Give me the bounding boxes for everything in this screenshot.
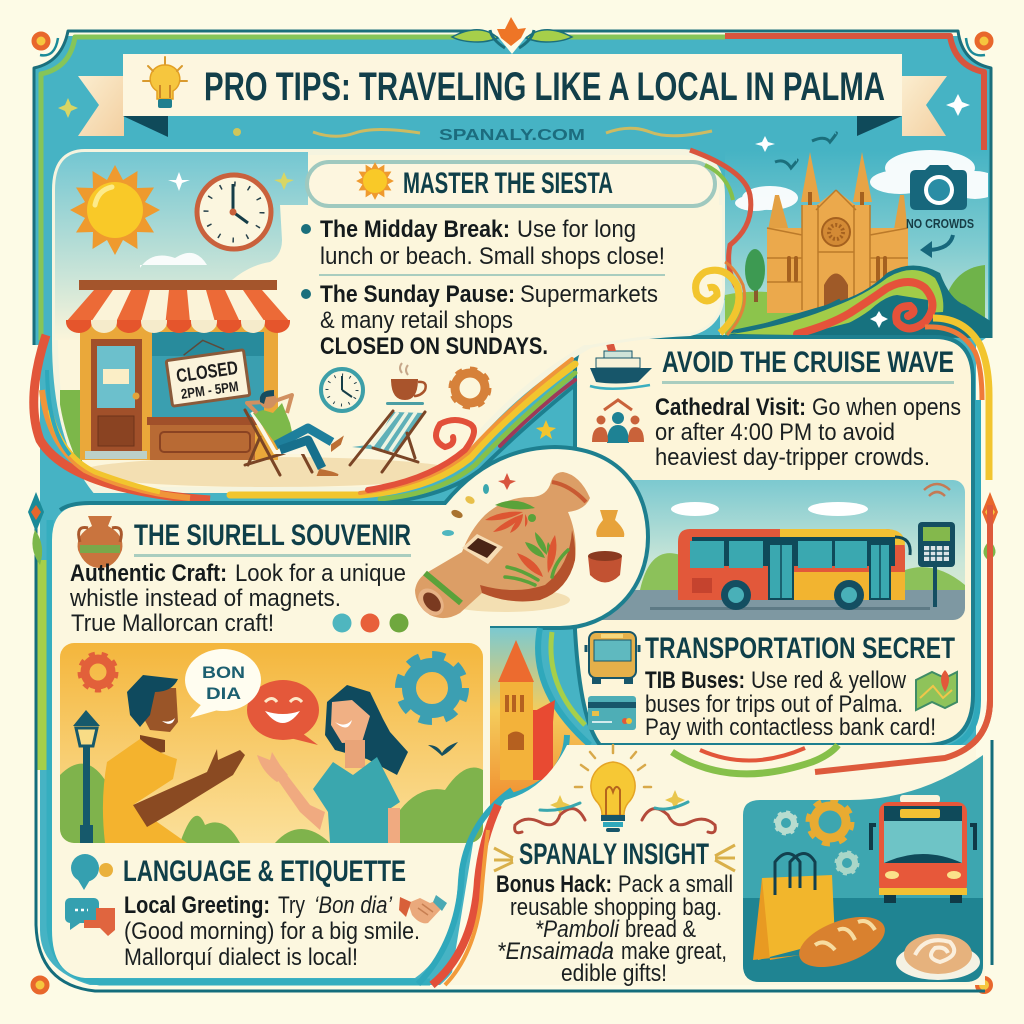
text: bonus hack: edible gifts! — [561, 960, 667, 987]
text: authentic craft — [69, 560, 406, 637]
text: bonus hack: reusable shopping bag. — [510, 894, 722, 921]
panel: avoid the cruise wave and transportation — [575, 318, 990, 772]
text: authentic craft: whistle instead of magnets. — [69, 585, 341, 612]
star decoration — [536, 420, 556, 439]
clouds — [735, 150, 1000, 211]
decorative right swirl — [690, 150, 751, 335]
icon: talking heads — [71, 854, 113, 890]
website label: SPANALY.COM — [439, 127, 585, 144]
illustration: conversation — [60, 643, 483, 843]
illustration: siurell whistle — [413, 472, 590, 621]
text: TIB buses: TIB Buses: — [645, 667, 745, 694]
icon: gear — [451, 369, 489, 407]
icon: wall clock — [197, 175, 271, 249]
shop counter — [147, 417, 265, 460]
bushes — [60, 764, 483, 843]
leaf accents — [494, 845, 735, 871]
icon: coffee cup — [386, 363, 426, 405]
icon: payment terminal — [918, 484, 955, 607]
decorative waves — [722, 266, 992, 338]
arrow: no crowds — [920, 235, 953, 258]
text: authentic craft: Authentic Craft: — [70, 560, 227, 587]
panel: spanaly insight — [419, 701, 993, 988]
man figure — [103, 675, 245, 843]
text: cathedral visit: Cathedral Visit: — [655, 394, 806, 421]
text: bonus hack: *Pamboli — [535, 916, 620, 943]
icon: red and yellow bus — [678, 529, 910, 610]
text: cathedral visit — [655, 394, 961, 471]
text: midday break: Use for long — [517, 216, 636, 243]
heading pill: master the siesta — [307, 162, 715, 206]
bird — [428, 742, 458, 756]
text: sunday pause: Supermarkets — [520, 281, 658, 308]
text: bonus hack: Bonus Hack: — [496, 871, 612, 898]
icon: bank card — [588, 696, 636, 730]
icon: sun — [70, 165, 160, 255]
text: midday break: lunch or beach. Small shops close! — [320, 243, 665, 270]
icon: church tower — [498, 640, 555, 780]
icon: small bus — [586, 632, 639, 684]
illustration: empty deck chair — [350, 411, 425, 472]
text: cathedral visit: heaviest day-tripper crowds. — [655, 444, 930, 471]
top fleck decorations — [58, 94, 970, 190]
icon: red smile bubble — [247, 680, 319, 745]
language and etiquette text — [65, 854, 447, 971]
text: TIB buses: buses for trips out of Palma. — [645, 691, 903, 718]
sign: closed 2pm-5pm: CLOSED — [175, 358, 239, 387]
label: no crowds: NO CROWDS — [906, 216, 974, 231]
panel: siurell souvenir and language — [52, 447, 648, 978]
illustration: closed shop — [66, 280, 290, 460]
illustration: man relaxing on deck chair — [245, 390, 342, 475]
sign: closed 2pm-5pm — [164, 335, 250, 406]
text: bonus hack: make great, — [621, 938, 727, 965]
panel: siesta — [34, 150, 751, 503]
top centre ornament — [452, 17, 572, 54]
icon: handshake — [399, 895, 447, 923]
icon: gears — [775, 800, 858, 874]
illustration: shopping, bus and food — [743, 750, 983, 988]
icon: lightbulb — [550, 745, 685, 832]
icon: map — [916, 670, 957, 710]
illustration: bus scene — [575, 480, 965, 620]
speech bubble: bon dia — [185, 649, 261, 718]
text: cathedral visit: Go when opens — [812, 394, 961, 421]
text: authentic craft: Look for a unique — [235, 560, 406, 587]
icon: bread loaf — [799, 917, 885, 967]
icon: crowd — [592, 400, 644, 443]
text: bonus hack — [496, 871, 733, 987]
birds — [775, 133, 836, 168]
text: local greeting: Local Greeting: — [124, 892, 270, 919]
heading: master the siesta text: MASTER THE SIESTA — [403, 167, 613, 200]
text: sunday pause: The Sunday Pause: — [320, 281, 515, 308]
icon: chat bubbles — [65, 898, 115, 936]
header sub-line — [233, 127, 712, 144]
icon: clay jug — [78, 516, 122, 568]
icon: teal gear — [399, 655, 465, 721]
icon: bus front — [871, 795, 975, 903]
text: sunday pause: & many retail shops — [320, 307, 513, 334]
text: local greeting — [124, 892, 420, 971]
text: TIB buses: Pay with contactless bank card! — [645, 714, 936, 741]
icon: small pot — [588, 551, 622, 582]
left rainbow stripes — [34, 335, 210, 500]
speech bubble: bon dia: DIA — [206, 684, 241, 703]
icon: title lightbulb — [143, 57, 187, 108]
lamp post — [73, 710, 100, 843]
icon: tree — [745, 249, 765, 302]
decorative flourishes — [515, 802, 715, 833]
icon: small jug — [596, 510, 624, 537]
title ribbon — [78, 54, 947, 137]
icon: small clock — [321, 369, 363, 411]
text: bonus hack: bread & — [625, 916, 696, 943]
text: bonus hack: Pack a small — [618, 871, 733, 898]
icon: cathedral — [767, 152, 908, 313]
bottom frame line — [430, 990, 985, 992]
icon: ensaimada on plate — [896, 934, 980, 980]
shop awning — [66, 290, 290, 333]
heading: spanaly insight: SPANALY INSIGHT — [519, 838, 709, 871]
icon: cruise ship — [590, 344, 652, 389]
woman figure — [257, 685, 408, 843]
text: midday break — [301, 216, 665, 270]
text: bonus hack: *Ensaimada — [497, 938, 614, 965]
illustration: church vignette — [490, 628, 590, 812]
text: sunday pause — [301, 281, 658, 360]
decorative rainbow swirl — [230, 359, 575, 503]
text: TIB buses — [645, 667, 936, 741]
colour dots — [332, 614, 408, 632]
heading: the siurell souvenir: THE SIURELL SOUVENIR — [134, 519, 411, 552]
text: authentic craft: True Mallorcan craft! — [71, 610, 274, 637]
icon: shopping bag — [753, 854, 835, 960]
icon: camera — [910, 165, 967, 210]
speech bubble: bon dia: BON — [202, 663, 245, 682]
shop door — [91, 339, 142, 451]
sign: closed 2pm-5pm: 2PM - 5PM — [180, 378, 240, 402]
flecks around whistle — [442, 473, 516, 536]
text: sunday pause: CLOSED ON SUNDAYS. — [320, 333, 548, 360]
text: local greeting: Try — [278, 892, 305, 919]
icon: small sun — [356, 162, 394, 200]
panel: right scene with cathedral — [720, 133, 1000, 340]
rainbow arcs under transport panel — [672, 600, 990, 774]
text: midday break: The Midday Break: — [320, 216, 510, 243]
icon: orange gear — [80, 654, 116, 690]
heading: language and etiquette: LANGUAGE & ETIQUETTE — [123, 855, 406, 888]
text: local greeting: ‘Bon dia’ — [314, 892, 393, 919]
text: cathedral visit: or after 4:00 PM to avoid — [655, 419, 895, 446]
text: local greeting: Mallorquí dialect is local! — [124, 944, 358, 971]
text: TIB buses: Use red & yellow — [751, 667, 907, 694]
text: local greeting: (Good morning) for a big smile. — [124, 918, 420, 945]
